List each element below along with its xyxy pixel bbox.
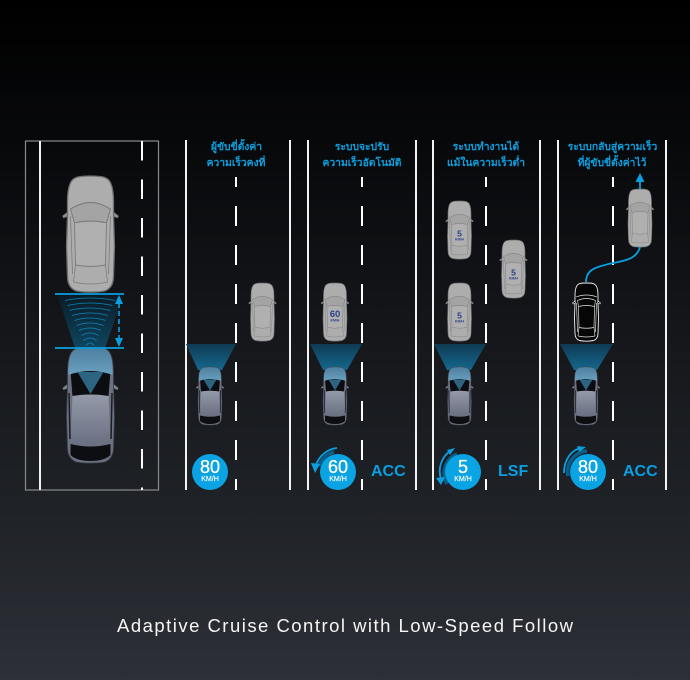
sensor cone bbox=[560, 344, 613, 370]
lane frame bbox=[26, 141, 158, 490]
panel: low speed operation bbox=[433, 140, 540, 490]
panel: return to set speed bbox=[558, 139, 666, 490]
heading: ระบบทำงานได้ bbox=[453, 140, 520, 153]
dashed lane line bbox=[612, 177, 614, 490]
icon: lead car middle bbox=[446, 283, 474, 341]
panel: automatic speed adjustment bbox=[308, 140, 416, 490]
speed badge bbox=[311, 448, 356, 490]
icon: lead car bbox=[62, 176, 118, 292]
icon: adjacent lane car: KM/H bbox=[509, 276, 518, 280]
arrow: forward bbox=[636, 173, 644, 189]
distance lines bbox=[55, 294, 124, 348]
speed badge: KM/H bbox=[454, 476, 472, 483]
icon: own car bbox=[446, 367, 474, 425]
speed badge: 5 bbox=[458, 457, 468, 477]
icon: adjacent lane car: 5 bbox=[511, 268, 516, 278]
icon: own car bbox=[321, 367, 349, 425]
icon: own car bbox=[196, 367, 224, 425]
dashed lane line bbox=[235, 177, 237, 490]
icon: lead car: 60 bbox=[330, 309, 340, 320]
mode label: LSF bbox=[498, 463, 528, 480]
heading: ที่ผู้ขับขี่ตั้งค่าไว้ bbox=[578, 154, 647, 170]
speed badge: 60 bbox=[328, 457, 348, 477]
speed badge: KM/H bbox=[579, 476, 597, 483]
lane lines bbox=[186, 140, 290, 490]
dashed lane line bbox=[485, 177, 487, 490]
icon: lead car middle: KM/H bbox=[455, 320, 464, 324]
icon: own car bbox=[572, 367, 600, 425]
icon: lead car middle: 5 bbox=[457, 310, 462, 320]
icon: lead car bbox=[248, 283, 276, 341]
lane lines bbox=[308, 140, 416, 490]
heading: ระบบกลับสู่ความเร็ว bbox=[568, 139, 657, 154]
icon: lead car top: 5 bbox=[457, 228, 462, 238]
lane lines bbox=[558, 140, 666, 490]
sensor cone bbox=[310, 344, 362, 370]
heading: ผู้ขับขี่ตั้งค่า bbox=[211, 138, 262, 154]
icon: adjacent lane car bbox=[500, 240, 528, 298]
lane lines bbox=[433, 140, 540, 490]
heading: ความเร็วอัตโนมัติ bbox=[322, 155, 402, 169]
panel: driver sets speed bbox=[186, 138, 290, 490]
title: Adaptive Cruise Control with Low-Speed Follow bbox=[117, 615, 574, 636]
heading: ความเร็วคงที่ bbox=[207, 155, 266, 169]
distance arrow bbox=[115, 295, 123, 347]
icon: own car bbox=[62, 347, 118, 463]
speed badge: 80 bbox=[200, 457, 220, 477]
icon: lead car top: KM/H bbox=[455, 238, 464, 242]
mode label: ACC bbox=[623, 463, 658, 480]
speed badge bbox=[564, 446, 606, 490]
sensor cone bbox=[434, 344, 486, 370]
icon: lead car bbox=[321, 283, 349, 341]
mode label: ACC bbox=[371, 463, 406, 480]
speed badge bbox=[436, 448, 481, 490]
heading: แม้ในความเร็วต่ำ bbox=[447, 155, 525, 169]
icon: white outline car bbox=[572, 283, 600, 341]
dashed lane line bbox=[141, 141, 143, 490]
heading: ระบบจะปรับ bbox=[335, 141, 390, 153]
icon: lead car: KM/H bbox=[331, 318, 340, 322]
dashed lane line bbox=[361, 177, 363, 490]
speed badge bbox=[192, 454, 228, 490]
panel: overview distance sensing bbox=[26, 141, 158, 490]
icon: lead car top bbox=[446, 201, 474, 259]
sensor cone bbox=[186, 344, 236, 370]
left lane line bbox=[39, 141, 41, 490]
sensor cone bbox=[57, 294, 124, 348]
radar arcs bbox=[65, 298, 115, 346]
speed badge: 80 bbox=[578, 457, 598, 477]
speed badge: KM/H bbox=[201, 476, 219, 483]
arrow: lane change path bbox=[586, 247, 640, 282]
icon: car ahead bbox=[626, 189, 654, 247]
speed badge: KM/H bbox=[329, 476, 347, 483]
